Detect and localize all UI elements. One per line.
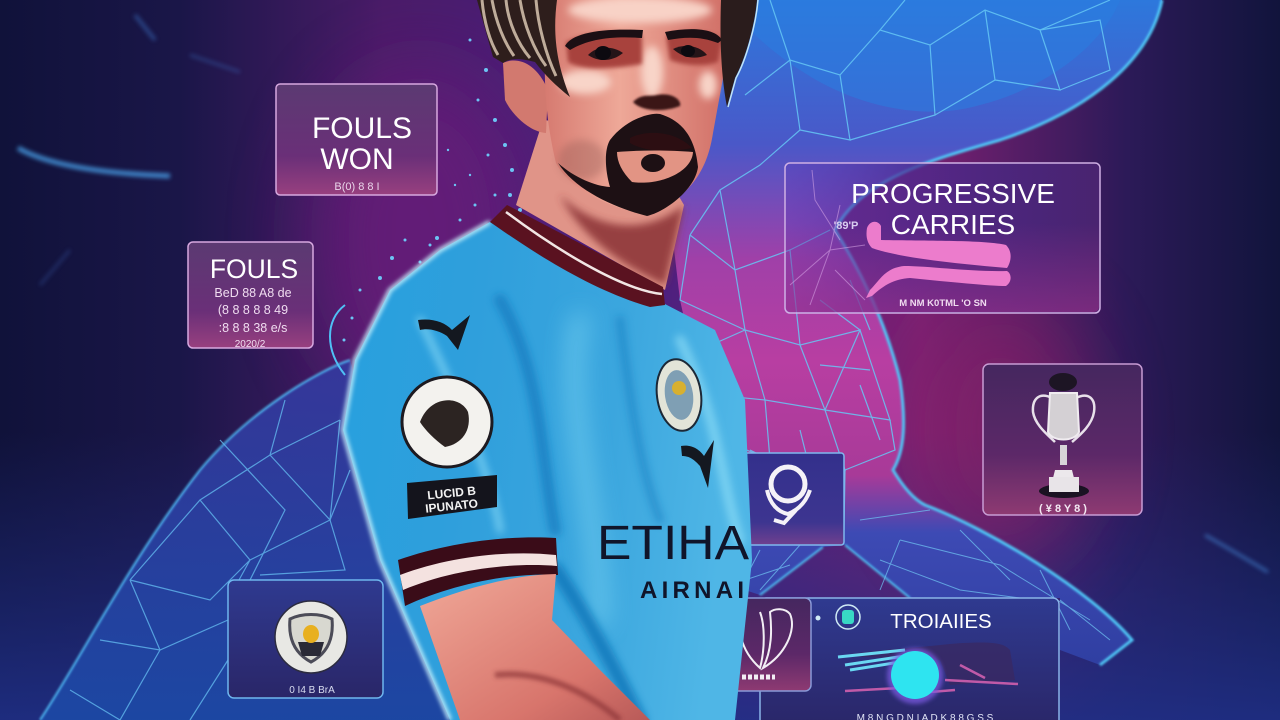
player <box>343 0 758 720</box>
sleeve patch: LUCID B <box>427 483 477 503</box>
pink bars <box>866 222 1011 298</box>
forehead highlight <box>568 0 712 23</box>
sleeve cuff <box>398 537 558 606</box>
ear <box>503 60 548 133</box>
hair left <box>477 0 570 97</box>
eye sockets and brows <box>565 29 722 68</box>
mesh lines: left <box>70 400 350 720</box>
beard and mouth <box>558 114 698 216</box>
heading: fouls won: WON <box>320 143 394 176</box>
icon: sleeve logo <box>418 315 470 350</box>
face <box>545 0 732 216</box>
icon: ring emblem <box>767 467 810 523</box>
particles around shoulder and head <box>342 38 522 342</box>
crest on shirt <box>652 356 706 434</box>
shoulder rim light <box>343 222 490 720</box>
heading: progressive carries: CARRIES <box>891 209 1015 240</box>
stat rows: BeD 88 A8 de <box>214 286 292 300</box>
panel: club badge <box>228 580 383 698</box>
network silhouette: right body <box>670 0 1162 665</box>
panel: progressive carries <box>785 163 1100 313</box>
small label: '89'P <box>834 220 858 232</box>
hair right rim light <box>728 0 758 107</box>
stubble <box>558 140 606 180</box>
nose <box>633 94 680 110</box>
cheek highlights <box>559 46 717 99</box>
small caption: M NM K0TML 'O SN <box>899 298 987 309</box>
network silhouette: left body <box>40 305 450 720</box>
stat rows: :8 8 8 38 e/s <box>219 321 287 335</box>
icon: trophy <box>1033 373 1094 498</box>
mesh overlay inside panel <box>790 170 865 305</box>
arm <box>420 574 650 720</box>
heading: fouls won: FOULS <box>312 112 412 145</box>
heading: trophies: TROIAIIES <box>890 610 992 633</box>
heading: fouls: FOULS <box>210 254 298 284</box>
icon: small teal badge <box>816 605 860 629</box>
icon: trophy outline <box>740 609 792 677</box>
small caption: B(0) 8 8 I <box>334 181 380 193</box>
sleeve patch: IPUNATO <box>425 496 479 516</box>
panel: fouls <box>188 242 313 350</box>
icon: club crest <box>275 601 347 673</box>
small caption: ( ¥ 8 Y 8 ) <box>1039 503 1087 515</box>
sponsor text: ETIHA <box>597 517 749 570</box>
panel: ring icon <box>745 453 844 545</box>
neck <box>516 120 684 290</box>
small caption: 0 I4 B BrA <box>289 685 335 696</box>
sleeve patch <box>407 475 497 519</box>
panel: trophies <box>760 598 1059 720</box>
stat rows <box>214 286 292 350</box>
shirt folds <box>420 300 740 720</box>
glowing ball graphic <box>838 643 1018 704</box>
sponsor text <box>597 517 749 604</box>
icon: chest logo <box>681 440 714 488</box>
jersey <box>343 222 752 720</box>
icon: premier league badge <box>402 377 492 467</box>
heading: progressive carries: PROGRESSIVE <box>851 178 1055 209</box>
hair right <box>721 0 757 107</box>
stat rows: (8 8 8 8 8 49 <box>218 303 288 317</box>
panel: fouls won <box>276 84 437 195</box>
panel: trophy <box>983 364 1142 515</box>
mesh lines: upper right <box>680 0 1110 530</box>
collar <box>490 205 665 307</box>
sponsor text: AIRNAI <box>640 577 744 604</box>
stat rows: 2020/2 <box>235 339 266 350</box>
panel: small trophy <box>725 598 811 691</box>
hair streaks <box>482 0 556 76</box>
mesh lines: lower right <box>735 510 1110 640</box>
